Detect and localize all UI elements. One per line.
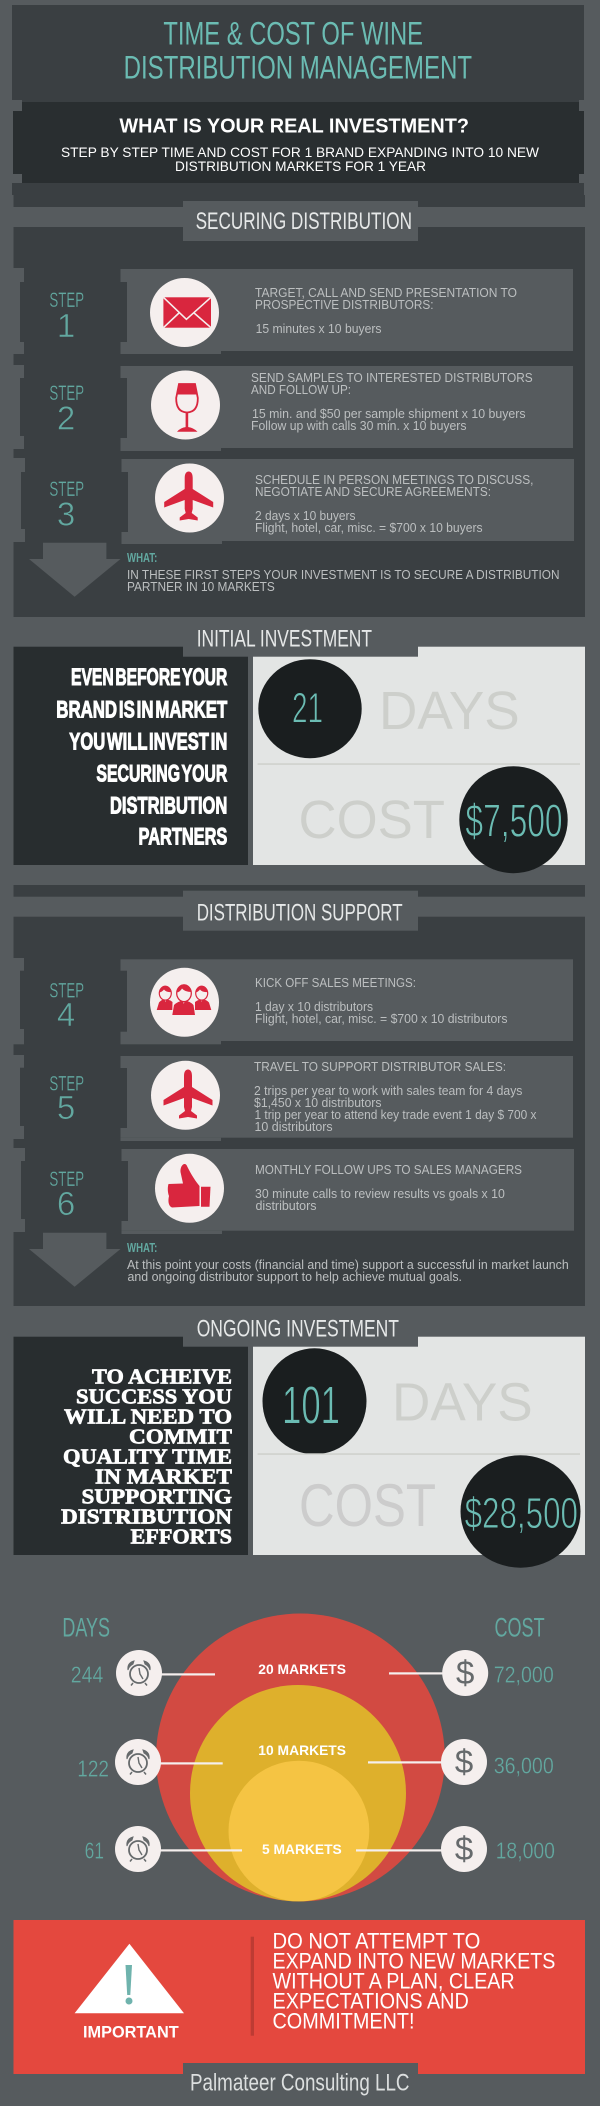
warning text: DO NOT ATTEMPT TO: [272, 1928, 480, 1953]
cost stat: COST: [299, 1472, 436, 1539]
step 6 text: 30 minute calls to review results vs goals x 10: [255, 1186, 505, 1201]
step 5 text: 2 trips per year to work with sales team for 4 days: [254, 1083, 523, 1098]
row: 244 days: 244: [71, 1662, 103, 1688]
icon: clock: [115, 1826, 161, 1872]
warning text: EXPECTATIONS AND: [272, 1988, 469, 2013]
step 1: [13, 268, 573, 354]
icon: dollar: $: [455, 1830, 473, 1867]
what note 2: and ongoing distributor support to help achieve mutual goals.: [128, 1269, 462, 1284]
step 6 text: [255, 1162, 522, 1213]
row: 18,000 cost: 18,000: [496, 1838, 555, 1864]
step 4: STEP: [49, 979, 84, 1002]
panel: ongoing investment: [14, 1315, 585, 1568]
statement text: BRAND IS IN MARKET: [56, 696, 228, 723]
what note 1: IN THESE FIRST STEPS YOUR INVESTMENT IS TO SECURE A DISTRIBUTION: [127, 567, 560, 582]
subtitle band: WHAT IS YOUR REAL INVESTMENT?: [119, 116, 469, 138]
statement text: DISTRIBUTION: [61, 1505, 232, 1529]
row: 61 days: 61: [85, 1838, 104, 1864]
days stat: 21: [292, 685, 323, 733]
title: TIME & COST OF WINE: [163, 15, 423, 51]
subtitle band: [13, 102, 584, 183]
step 1 text: [255, 285, 517, 336]
step 3: STEP: [49, 478, 84, 501]
step 2 text: AND FOLLOW UP:: [251, 382, 351, 397]
statement text: SUPPORTING: [82, 1485, 232, 1509]
icon: airplane: [155, 464, 224, 532]
column heading: cost: COST: [494, 1613, 545, 1643]
statement text: SECURING YOUR: [96, 760, 227, 787]
row: 36,000 cost: 36,000: [494, 1753, 554, 1779]
warning text: EXPAND INTO NEW MARKETS: [272, 1948, 555, 1973]
step 5 text: 1 trip per year to attend key trade event 1 day $ 700 x: [254, 1107, 537, 1122]
step 3 text: SCHEDULE IN PERSON MEETINGS TO DISCUSS,: [255, 472, 534, 487]
statement text: WILL NEED TO: [64, 1404, 232, 1428]
step 4 text: [255, 975, 508, 1026]
step 2 text: [251, 370, 533, 433]
step 1: STEP: [49, 289, 84, 312]
cost stat: [299, 1455, 580, 1568]
heading: distribution support: [183, 891, 418, 931]
circle: 5 markets: [228, 1761, 369, 1901]
step 6: [13, 1148, 574, 1234]
label: 20 markets: 20 MARKETS: [258, 1661, 346, 1677]
warning text: [272, 1928, 555, 2033]
statement text: QUALITY TIME: [63, 1445, 232, 1469]
step 3 text: Flight, hotel, car, misc. = $700 x 10 buyers: [255, 520, 483, 535]
label: 5 markets: 5 MARKETS: [262, 1841, 342, 1857]
heading: securing distribution: [183, 201, 418, 241]
statement text: IN MARKET: [95, 1465, 232, 1489]
step 1 text: PROSPECTIVE DISTRIBUTORS:: [255, 297, 434, 312]
row: 72,000 cost: [389, 1650, 554, 1696]
step 6 text: distributors: [256, 1198, 317, 1213]
step 1 text: 15 minutes x 10 buyers: [256, 321, 382, 336]
circle: 20 markets: [156, 1614, 445, 1902]
row: 36,000 cost: [368, 1739, 554, 1785]
icon: dollar: $: [455, 1743, 473, 1780]
subtitle band: DISTRIBUTION MARKETS FOR 1 YEAR: [175, 158, 426, 174]
warning text: WITHOUT A PLAN, CLEAR: [272, 1968, 515, 1993]
what note 1: WHAT:: [127, 550, 157, 565]
icon: clock: [116, 1650, 162, 1696]
step 6 text: MONTHLY FOLLOW UPS TO SALES MANAGERS: [255, 1162, 522, 1177]
step 5: 5: [57, 1089, 75, 1126]
row: 18,000 cost: [356, 1826, 555, 1872]
row: 122 days: 122: [77, 1756, 109, 1782]
row: 122 days: [77, 1739, 223, 1785]
arrow: down: [29, 543, 120, 597]
step 3: 3: [57, 495, 75, 532]
icon: dollar: $: [456, 1654, 474, 1691]
statement text: DISTRIBUTION: [110, 792, 227, 819]
step 4: 4: [57, 996, 75, 1033]
step 4 text: 1 day x 10 distributors: [255, 999, 373, 1014]
step 3: [13, 458, 574, 544]
step 5 text: 10 distributors: [254, 1119, 333, 1134]
step 2: STEP: [49, 382, 84, 405]
statement text: PARTNERS: [138, 824, 227, 851]
step 5: [13, 1055, 573, 1141]
arrow: down: [29, 1233, 120, 1287]
footer: company name: [183, 2063, 418, 2106]
step 1 text: TARGET, CALL AND SEND PRESENTATION TO: [255, 285, 517, 300]
days stat: DAYS: [392, 1373, 533, 1433]
statement text: [56, 664, 228, 851]
statement text: TO ACHEIVE: [92, 1364, 232, 1388]
column heading: days: DAYS: [62, 1613, 110, 1643]
cost stat: COST: [298, 790, 445, 850]
statement text: [61, 1364, 232, 1549]
step 3 text: [255, 472, 534, 535]
step 2: [13, 365, 573, 451]
row: 72,000 cost: 72,000: [494, 1662, 554, 1688]
step 4: [13, 958, 573, 1044]
statement text: COMMIT: [129, 1424, 232, 1448]
title: [124, 15, 472, 85]
chart: nested market circles: [62, 1613, 555, 1902]
what note 2: WHAT:: [127, 1240, 157, 1255]
icon: envelope: [150, 278, 219, 347]
what note 1: [127, 550, 560, 594]
statement text: YOU WILL INVEST IN: [69, 728, 227, 755]
step 2 text: SEND SAMPLES TO INTERESTED DISTRIBUTORS: [251, 370, 533, 385]
footer: company name: Palmateer Consulting LLC: [190, 2070, 410, 2097]
what note 2: [127, 1240, 569, 1284]
icon: warning triangle: [75, 1944, 184, 2013]
what note 1: PARTNER IN 10 MARKETS: [127, 579, 275, 594]
panel: securing distribution: [13, 201, 585, 617]
step 1: 1: [57, 307, 75, 344]
row: 61 days: [85, 1826, 242, 1872]
step 6: STEP: [49, 1168, 84, 1191]
heading: distribution support: DISTRIBUTION SUPPORT: [197, 900, 403, 927]
step 2: 2: [57, 399, 75, 436]
step 5 text: TRAVEL TO SUPPORT DISTRIBUTOR SALES:: [254, 1059, 506, 1074]
step 5 text: [254, 1059, 537, 1134]
step 2 text: 15 min. and $50 per sample shipment x 10 buyers: [252, 406, 526, 421]
icon: airplane: [151, 1061, 220, 1130]
step 4 text: Flight, hotel, car, misc. = $700 x 10 distributors: [255, 1011, 508, 1026]
step 5 text: $1,450 x 10 distributors: [254, 1095, 382, 1110]
statement text: SUCCESS YOU: [76, 1384, 232, 1408]
icon: dollar: [442, 1650, 488, 1696]
heading: ongoing investment: [183, 1315, 418, 1347]
days stat: DAYS: [379, 681, 520, 741]
warning text: COMMITMENT!: [272, 2008, 414, 2033]
icon: dollar: [441, 1739, 487, 1785]
step 2 text: Follow up with calls 30 min. x 10 buyers: [251, 418, 467, 433]
heading: ongoing investment: ONGOING INVESTMENT: [197, 1316, 399, 1343]
heading: securing distribution: SECURING DISTRIBUTION: [196, 208, 412, 235]
heading: initial investment: INITIAL INVESTMENT: [197, 626, 372, 653]
step 3 text: NEGOTIATE AND SECURE AGREEMENTS:: [255, 484, 491, 499]
cost stat: [298, 766, 568, 873]
row: 244 days: [71, 1650, 215, 1696]
step 6: 6: [57, 1185, 75, 1222]
step 5: STEP: [49, 1073, 84, 1096]
days stat: 101: [282, 1376, 340, 1436]
title: DISTRIBUTION MANAGEMENT: [124, 49, 472, 85]
subtitle band: STEP BY STEP TIME AND COST FOR 1 BRAND EXPANDING INTO 10 NEW: [61, 144, 540, 160]
circle: 10 markets: [190, 1685, 406, 1901]
panel: important warning: [14, 1920, 585, 2074]
icon: clock: [115, 1739, 161, 1785]
what note 2: At this point your costs (financial and time) support a successful in market launch: [127, 1257, 569, 1272]
step 4 text: KICK OFF SALES MEETINGS:: [255, 975, 416, 990]
days stat: [262, 1348, 533, 1454]
panel: distribution support: [13, 885, 585, 1306]
panel: initial investment: [14, 625, 585, 873]
label: important: IMPORTANT: [83, 2023, 179, 2042]
statement text: EFFORTS: [130, 1525, 232, 1549]
icon: thumbs up: [155, 1154, 224, 1223]
icon: dollar: [441, 1826, 487, 1872]
icon: people: [150, 968, 219, 1037]
panel: title header: [0, 5, 600, 207]
label: 10 markets: 10 MARKETS: [258, 1742, 346, 1758]
step 3 text: 2 days x 10 buyers: [255, 508, 356, 523]
icon: wine glass: [151, 370, 220, 440]
statement text: EVEN BEFORE YOUR: [71, 664, 227, 691]
days stat: [258, 659, 520, 758]
